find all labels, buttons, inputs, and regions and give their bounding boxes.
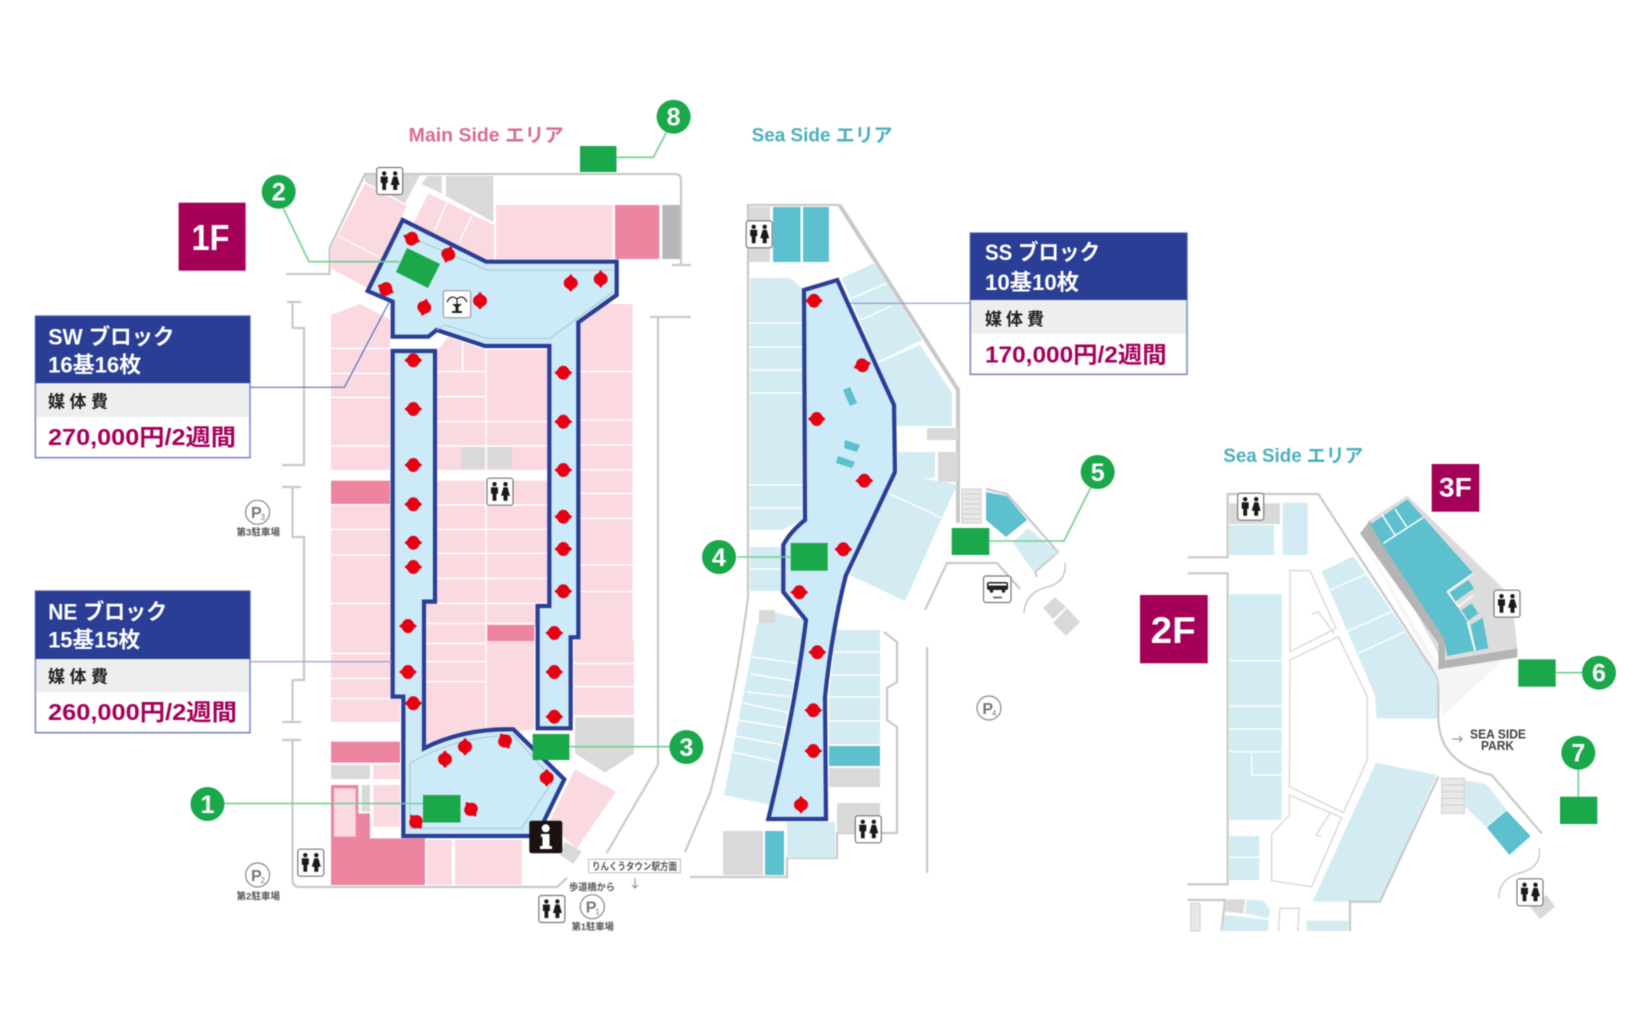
parking P1: P xyxy=(586,900,597,916)
panel: NE block: 15基15枚 xyxy=(48,628,140,653)
ad panel 6 xyxy=(1518,659,1556,687)
sign: Rinku Town station direction: りんくうタウン駅方面 xyxy=(592,860,677,873)
connector: NE block xyxy=(250,661,392,663)
ad panel 4 xyxy=(791,543,828,571)
panel: SW block: 媒 体 費 xyxy=(48,392,108,411)
poster markers xyxy=(375,229,873,833)
parking P3: 3 xyxy=(260,513,266,522)
floor badge 3F: 3F xyxy=(1439,473,1472,503)
SW block walkway xyxy=(368,220,617,728)
panel: SW block xyxy=(35,316,250,458)
callout number 6: 6 xyxy=(1592,660,1606,688)
floor badge 2F: 2F xyxy=(1151,610,1196,651)
callout number 3: 3 xyxy=(679,734,693,762)
label: Sea Side Park xyxy=(1452,726,1526,753)
NE block walkway xyxy=(393,351,564,836)
callout number 5 xyxy=(989,455,1115,541)
floor 3F plan xyxy=(1360,496,1517,717)
ad panel 3 xyxy=(533,734,569,760)
connector: SW block xyxy=(250,302,389,387)
ad panel 2 xyxy=(396,248,440,288)
callout number 7: 7 xyxy=(1571,740,1585,768)
floor badge 3F xyxy=(1432,464,1479,512)
area heading: Sea Side 2F: Sea Side エリア xyxy=(1223,446,1363,467)
area heading: Sea Side 1F: Sea Side エリア xyxy=(752,126,893,147)
panel: NE block: 260,000円/2週間 xyxy=(48,699,237,725)
ad panel 1 xyxy=(423,795,460,822)
ad panel 8 xyxy=(580,146,616,172)
panel: SW block: 270,000円/2週間 xyxy=(48,424,236,450)
callout number 4 xyxy=(702,540,791,574)
connector: SS block xyxy=(850,302,970,304)
sign: Rinku Town station direction xyxy=(569,859,680,894)
icon: restrooms xyxy=(298,168,1543,922)
parking P2 xyxy=(236,863,280,902)
callout number 6 xyxy=(1556,656,1616,690)
callout number 8: 8 xyxy=(667,104,681,132)
parking P1: 1 xyxy=(595,908,600,916)
panel: SS block: 媒 体 費 xyxy=(985,310,1044,329)
parking P2: 2 xyxy=(260,876,266,885)
panel: NE block: NE ブロック xyxy=(48,599,167,624)
callout number 2 xyxy=(262,175,400,262)
icon: information xyxy=(529,821,562,853)
floor 2F plan xyxy=(1187,494,1555,931)
label: Sea Side Park: PARK xyxy=(1481,738,1515,753)
icon: fountain xyxy=(443,291,471,318)
sign: Rinku Town station direction: 歩道橋から xyxy=(569,882,615,894)
sea side 1F floor plan xyxy=(685,205,1080,877)
parking P4 xyxy=(977,696,1001,720)
callout number 7 xyxy=(1561,736,1595,797)
callout number 8 xyxy=(617,100,691,157)
parking P1 xyxy=(572,895,614,933)
panel: SS block: SS ブロック xyxy=(985,240,1100,265)
ad panel positions xyxy=(396,146,1597,824)
callout number 2: 2 xyxy=(272,179,286,207)
parking P2: 第2駐車場 xyxy=(236,890,280,902)
floor badge 1F: 1F xyxy=(192,217,230,258)
callout number 1 xyxy=(190,787,423,821)
callout number 3 xyxy=(569,730,703,764)
area heading: Main Side: Main Side エリア xyxy=(409,126,564,147)
panel: NE block xyxy=(35,591,250,733)
panel: NE block: 媒 体 費 xyxy=(48,668,108,687)
panel: SS block xyxy=(970,233,1187,374)
parking P4: P xyxy=(982,701,993,718)
parking P3 xyxy=(236,500,280,539)
parking P3: P xyxy=(251,505,262,522)
label: Sea Side Park: SEA SIDE xyxy=(1470,726,1526,741)
icon: bus stop xyxy=(984,576,1011,602)
SS block walkway xyxy=(768,280,895,819)
panel: SW block: 16基16枚 xyxy=(48,353,141,378)
ad panel 5 xyxy=(952,528,989,555)
ad panel 7 xyxy=(1560,797,1597,824)
callout number 5: 5 xyxy=(1091,459,1105,487)
SW and NE block walkways xyxy=(368,220,617,836)
callout number 1: 1 xyxy=(201,791,215,819)
floor badge 2F xyxy=(1140,595,1208,663)
seating marks xyxy=(836,387,860,468)
parking P4: 4 xyxy=(992,709,997,718)
panel: SS block: 10基10枚 xyxy=(985,270,1079,295)
panel: SS block: 170,000円/2週間 xyxy=(985,342,1167,368)
main side 1F walls xyxy=(282,174,691,887)
main side 1F floor plan: shops xyxy=(331,175,680,885)
callout number 4: 4 xyxy=(712,544,726,572)
parking P2: P xyxy=(251,868,262,885)
parking P3: 第3駐車場 xyxy=(236,527,280,539)
panel: SW block: SW ブロック xyxy=(48,324,175,349)
parking P1: 第1駐車場 xyxy=(572,921,614,933)
floor badge 1F xyxy=(179,203,246,271)
